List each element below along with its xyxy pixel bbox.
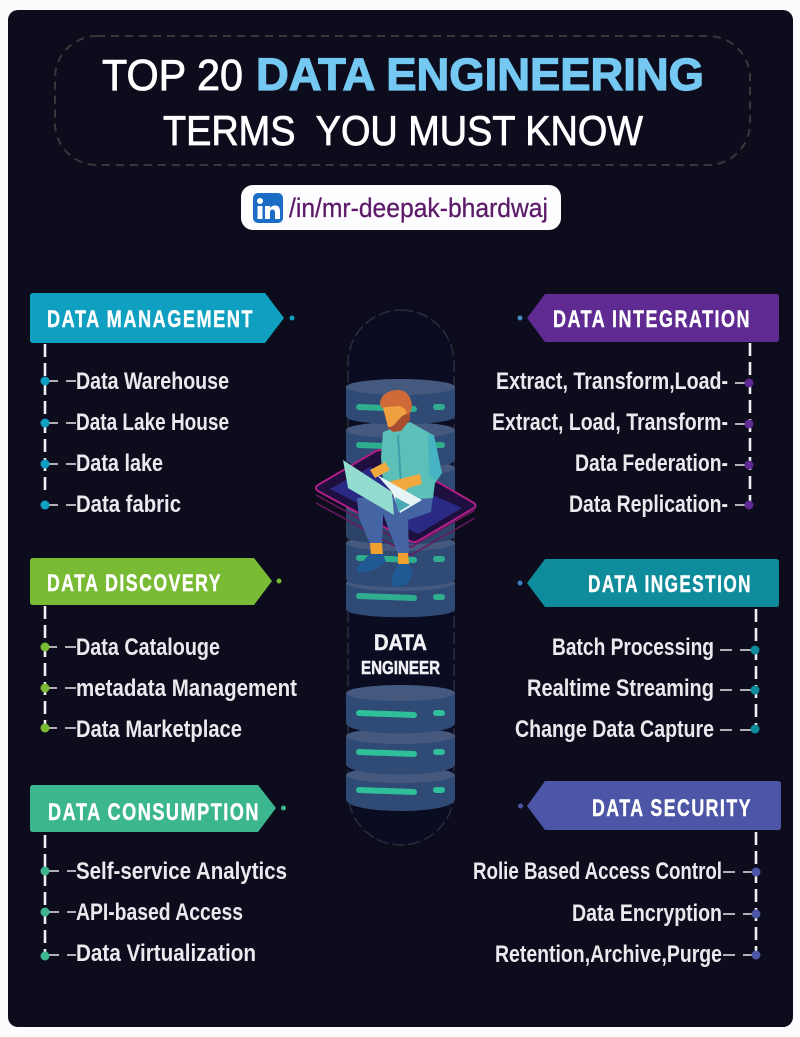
header dot [518,804,523,808]
header dot [276,578,282,584]
hair [380,390,412,414]
header dot [518,316,522,320]
icon: linkedin [253,193,283,223]
term list: Data Federation- [575,450,728,477]
linkedin handle: /in/mr-deepak-bhardwaj [289,193,548,223]
neck and face [383,402,410,430]
term list: Data Lake House [76,409,229,436]
title: TERMS YOU MUST KNOW [163,107,643,154]
term list [473,858,760,968]
connector line [749,343,751,505]
header [30,293,284,343]
term list [492,368,754,518]
connector line [755,609,757,730]
server stack: upper [346,379,455,617]
header dot [281,806,286,810]
header dot [518,580,522,586]
legs [357,496,433,554]
title frame [55,36,750,165]
term list: Batch Processing [552,634,714,661]
term list: Data Replication- [569,491,728,518]
sleeve [428,434,442,481]
term list [515,634,760,743]
connector line [44,835,46,956]
header text: DATA CONSUMPTION [48,799,260,826]
header [30,785,276,832]
section: data management [30,293,294,518]
header [30,558,272,605]
section: data integration [492,294,779,518]
center label: DATA [374,630,427,655]
section: data discovery [30,558,297,743]
connector line [44,344,46,494]
section: data ingestion [515,559,779,743]
term list: Data fabric [76,491,181,518]
header [527,781,781,830]
term list: Data Virtualization [76,940,256,967]
header dot [290,316,294,320]
center label [361,630,440,678]
term list: Realtime Streaming [527,675,714,702]
header text: DATA DISCOVERY [47,570,222,597]
term list: Retention,Archive,Purge [495,941,722,968]
section: data security [473,781,781,968]
term list: Data Encryption [572,900,722,927]
socks [370,543,409,565]
section: data consumption [30,785,287,967]
term list: Data Catalouge [76,634,220,661]
term list: Data lake [76,450,163,477]
term list [40,858,287,967]
title: DATA ENGINEERING [256,49,704,100]
tablet platform [316,450,476,555]
header [527,559,779,607]
laptop screen [343,460,394,515]
illustration: data engineer on tablet [316,390,476,588]
center label: ENGINEER [361,658,440,678]
title: TOP 20 [102,51,243,100]
title [102,49,704,154]
term list [40,368,229,518]
term list: Extract, Load, Transform- [492,409,728,436]
term list: API-based Access [76,899,243,926]
linkedin badge [241,185,561,230]
torso [381,422,442,500]
term list: Rolie Based Access Control [473,858,722,885]
term list: metadata Management [76,675,297,702]
term list: Data Marketplace [76,716,242,743]
term list: Change Data Capture [515,716,714,743]
term list [40,634,297,743]
header [527,294,779,342]
term list: Self-service Analytics [76,858,287,885]
beard [388,412,410,432]
header text: DATA MANAGEMENT [47,306,254,333]
term list: Data Warehouse [76,368,229,395]
server stack: lower [346,685,455,811]
connector line [44,606,46,729]
term list: Extract, Transform,Load- [496,368,728,395]
shoes [357,554,413,588]
arm and hand [370,462,422,496]
connector line [755,832,757,955]
laptop base [377,475,422,513]
central capsule [348,310,454,845]
